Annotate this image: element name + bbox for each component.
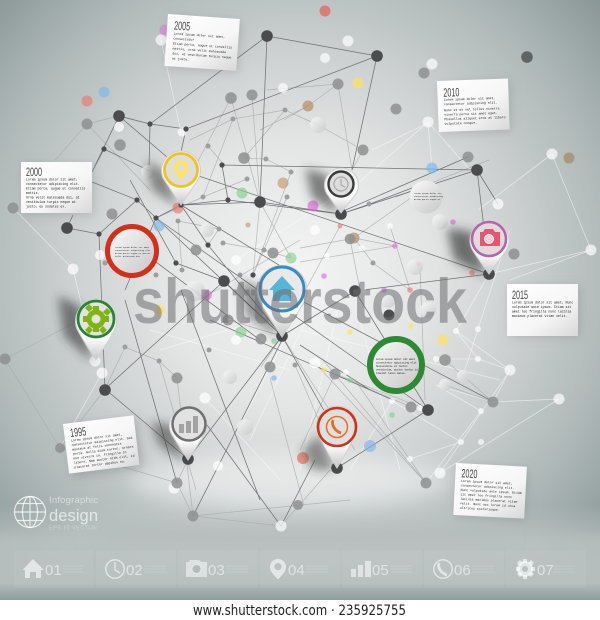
paper note: 2020: ultrices scelerisque. [460,506,500,512]
paper note: 2000: 2000 [26,165,42,179]
paper note: 2015: Lorem ipsum dolor sit amet, Nunc [512,300,573,304]
network: coloured and pale nodes [68,6,596,532]
ring callout: red: consectetur adipiscing elit [115,249,151,252]
paper note: 1995: libero. Nam auctor nibh elit, id [74,454,135,465]
paper note: 2000: Lorem ipsum dolor sit amet, [26,178,78,182]
paper note: 2010: Nunc et ex vel tellus viverra [444,106,500,112]
paper note: 2000 [21,162,94,215]
paper note: 1995: placerat tortor dapibus eu. [74,459,126,469]
pin: gear [58,296,116,362]
logo: infographic design: EPS 10 VECTOR [49,526,97,532]
panel 01: home [14,550,93,588]
paper note: 2005: dui, at vestibulum turpis neque [172,51,232,60]
paper note: 2015: amet leo fringilla nunc lacinia [512,310,571,314]
logo: infographic design: Infographic [49,495,98,506]
network: dark lines [67,36,498,526]
logo: infographic design: design [49,507,98,525]
icon: bars [179,416,198,433]
small text disc: consectetur adipiscing [414,195,444,198]
ring callout: red [108,226,156,276]
network: light gray lines [5,84,493,526]
pin: clock [305,168,358,214]
paper note: 2020 [453,463,529,521]
watermark: shutterstock [133,267,468,337]
footer url: www.shutterstock.com · 235925755 [193,603,406,619]
paper note: 1995: non viverra in, fringilla in [73,450,127,460]
paper note: 2020: 2020 [461,466,478,481]
panel 04: location: 04 [288,562,305,579]
bottom panels [14,550,586,588]
paper note: 2000: mattis. [26,191,39,195]
icon: phone [326,416,348,438]
ring callout: green [370,339,422,391]
small text disc [410,180,444,214]
panel 07: gear [506,550,586,588]
panel 07: gear: 07 [537,562,554,579]
paper note: 2020: sit amet leo fringilla nunc [460,492,512,499]
icon: camera [480,229,500,246]
paper note: 2000: vestibulum turpis neque at [26,200,76,204]
paper note: 1995: 1995 [69,424,87,440]
paper note: 2015: maximus placerat vitae velit. [512,314,568,318]
paper note: 2005 [164,14,242,73]
paper note: 2010 [437,78,512,134]
icon: clock face [334,177,348,191]
paper note: 2005: consectetur [173,36,195,42]
paper note: 1995: maximus at felis venenatis [72,442,122,452]
paper note: 2015 [507,284,580,337]
paper note: 2000: justo, eu sodales ex. [26,204,66,208]
panel 02: clock: 02 [126,562,143,579]
paper note: 2005: ac justo. [172,56,189,62]
paper note: 1995 [63,415,143,477]
ring callout: red: Etiam porta augue ut mattis [115,252,151,255]
logo: infographic design [14,495,98,532]
icon: globe [14,496,46,528]
pin: home [240,265,307,338]
icon: location [173,160,189,180]
paper note: 2015: 2015 [512,288,528,302]
paper note: 2005: Etiam porta, augue ut convallis [173,41,232,50]
panel 05: bars [342,550,422,588]
paper note: 2020: consectetur adipiscing elit. [461,483,515,490]
paper note: 2020: velit. Nunc nec lorem id urna [460,501,515,508]
pin: camera [447,221,509,276]
icon: home [269,276,295,301]
paper note: 2005: mattis, urna velit malesuada [172,46,226,54]
paper note: 2000: Etiam porta, augue ut convallis [26,186,85,190]
paper note: 2020: lacinia maximus placerat vitae [460,497,518,504]
panel 06: phone: 06 [454,562,471,579]
paper note: 2005: Lorem ipsum dolor sit amet, [174,31,225,39]
paper note: 2010: 2010 [443,85,460,100]
paper note: 2020: Nunc vulputate ante ipsum. Etiam [461,488,522,495]
paper note: 2000: consectetur adipiscing elit. [26,182,80,186]
pin: bar chart [150,407,206,462]
network: white lines [13,40,591,483]
pin: phone [302,406,358,470]
small text disc: Etiam porta augue ut [414,198,441,201]
paper note: 1995: porta. Nulla diam tortor, ornare [72,445,134,456]
panel 04: location [260,550,340,588]
paper note: 2015: vulputate ante ipsum. Etiam sit [512,305,571,309]
paper note: 1995: consectetur adipiscing elit. Sed [71,436,133,447]
ring callout: red: Lorem ipsum dolor sit amet [115,246,150,249]
ring callout: green: Lorem ipsum dolor sit amet [376,358,416,361]
paper note: 2010: Lorem ipsum dolor sit amet, [444,96,495,102]
paper note: 2010: Phasellus aliquet eros at libero [444,115,506,121]
ring callout: green: vestibulum, auctor tortor in [376,368,419,372]
pin: yellow location [146,151,200,207]
panel 03: camera [178,550,258,588]
panel 02: clock [96,550,176,588]
panel 06: phone [424,550,504,588]
paper note: 2000: Urna velit malesuada dui, at [26,196,80,200]
paper note: 2020: Lorem ipsum dolor sit amet, [461,479,513,485]
panel 01: home: 01 [45,562,62,579]
small text disc: Lorem ipsum dolor sit [414,192,442,195]
ring callout: red: velit malesuada dui [115,255,141,258]
ring callout: green: blandit lacus massa. [376,372,406,375]
paper note: 2010: viverra porta sit amet eget. [444,111,498,117]
paper note: 2005: 2005 [174,18,191,34]
panel 05: bars: 05 [372,562,389,579]
ring callout: green: consectetur adipiscing elit [376,362,417,364]
ring callout: green: Suspendisse at lectus [376,365,408,368]
paper note: 2010: consectetur adipiscing elit. [444,100,497,106]
paper note: 2010: vulputate congue. [444,121,477,126]
icon: gear [83,304,111,334]
network: dark and gray nodes [0,30,533,521]
panel 03: camera: 03 [208,562,225,579]
paper note: 1995: Lorem ipsum dolor sit amet, [71,432,123,443]
